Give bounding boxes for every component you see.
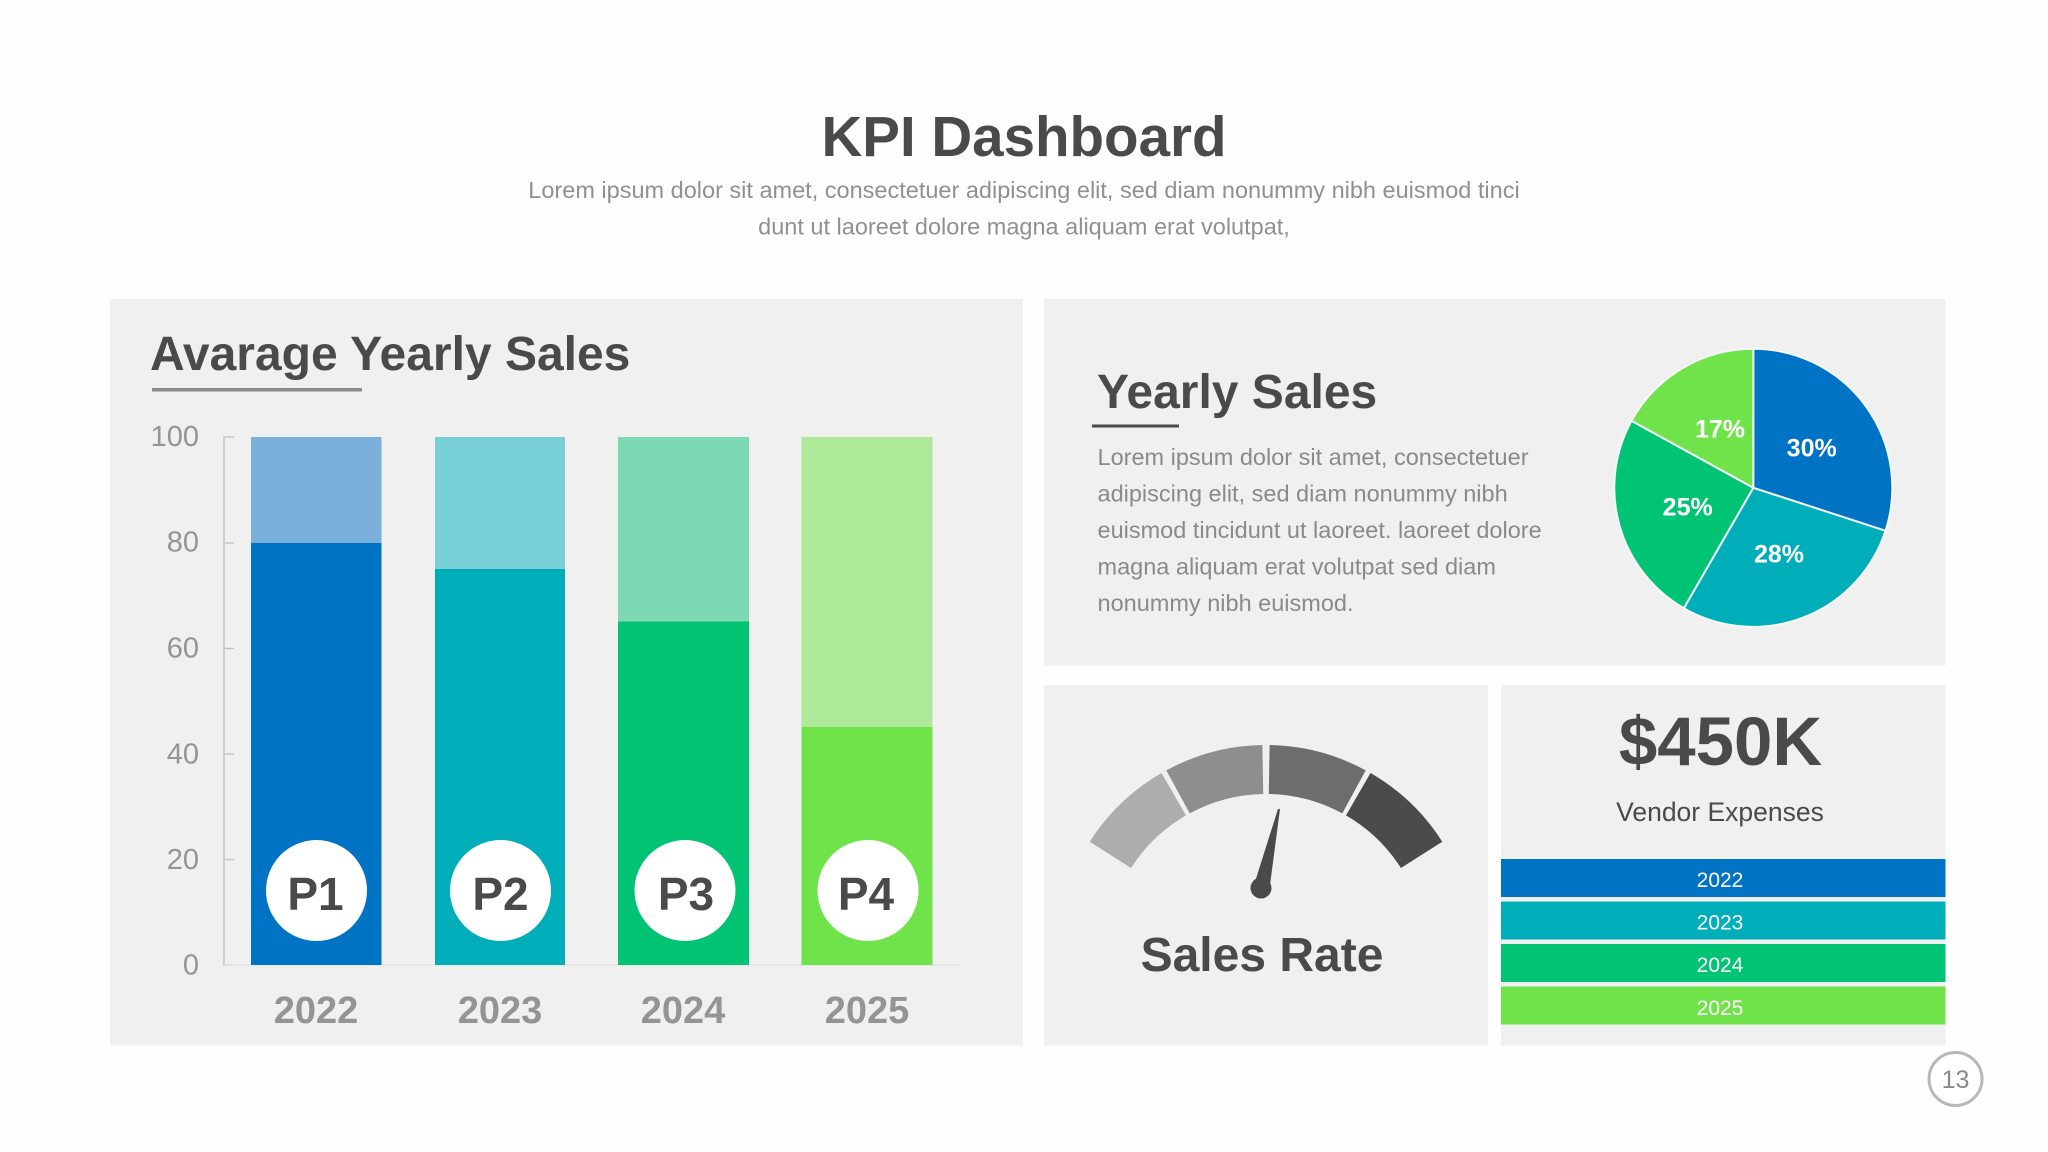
x axis year labels: [274, 990, 909, 1032]
panel: yearly sales: [1044, 299, 1946, 666]
page number: 13: [1942, 1066, 1969, 1094]
x axis year labels: 2022: [274, 990, 358, 1032]
pie labels: 30%: [1787, 435, 1837, 463]
body text: euismod tincidunt ut laoreet. laoreet dolore: [1098, 517, 1542, 543]
x axis year labels: 2023: [458, 990, 542, 1032]
subtitle text: Lorem ipsum dolor sit amet, consectetuer adipiscing elit, sed diam nonummy nibh euismod tinci: [528, 177, 1520, 203]
year bar: 2023: 2023: [1697, 912, 1743, 934]
panel: vendor expenses: [1501, 685, 1946, 1046]
year bar: 2022: [1501, 859, 1946, 897]
badge: P3: [634, 840, 736, 941]
bar: 2022: [251, 437, 382, 965]
body text: magna aliquam erat volutpat sed diam: [1098, 554, 1496, 580]
pie labels: 28%: [1754, 540, 1804, 568]
heading: yearly sales: Yearly Sales: [1097, 366, 1377, 419]
y axis labels: 40: [167, 738, 199, 770]
heading: average yearly sales: Avarage Yearly Sales: [150, 328, 630, 381]
heading underline: [152, 388, 362, 392]
title: KPI Dashboard: [822, 105, 1226, 168]
pie chart: [1614, 349, 1892, 627]
gauge arcs: [1110, 770, 1422, 855]
page number: [1929, 1052, 1982, 1106]
gauge label: Sales Rate: [1141, 929, 1383, 982]
body text: [1098, 444, 1542, 616]
year bar: 2025: [1501, 986, 1946, 1024]
year bar: 2023: [1501, 902, 1946, 940]
bar: 2023: [435, 437, 565, 965]
vendor label: Vendor Expenses: [1616, 797, 1824, 827]
chart axes: [224, 437, 960, 965]
year bar: 2022: 2022: [1697, 869, 1743, 892]
badge: P3: P3: [658, 868, 714, 920]
badge: P2: [450, 840, 551, 941]
x axis year labels: 2025: [825, 990, 909, 1032]
bar: 2024: [618, 437, 749, 965]
subtitle text: [528, 177, 1520, 240]
y axis labels: 60: [167, 632, 199, 664]
pie labels: [1663, 416, 1837, 568]
body text: adipiscing elit, sed diam nonummy nibh: [1098, 480, 1508, 506]
panel: sales rate: [1044, 685, 1488, 1046]
badge: P4: P4: [838, 868, 895, 920]
subtitle text: dunt ut laoreet dolore magna aliquam erat volutpat,: [758, 214, 1290, 240]
panel: average yearly sales: [110, 299, 1023, 1046]
year bar: 2024: [1501, 944, 1946, 982]
gauge needle: [1250, 809, 1280, 898]
y axis labels: 80: [167, 526, 199, 558]
big number: $450K: [1619, 703, 1822, 780]
heading underline: [1092, 424, 1179, 428]
y axis labels: 20: [167, 844, 199, 876]
y axis labels: 100: [151, 421, 199, 453]
pie labels: 17%: [1695, 416, 1745, 444]
badge: P1: P1: [287, 868, 344, 920]
bar: 2025: [802, 437, 932, 965]
year bar: 2024: 2024: [1697, 954, 1744, 977]
badge: P1: [266, 840, 367, 941]
badge: P2: P2: [472, 868, 529, 920]
body text: Lorem ipsum dolor sit amet, consectetuer: [1098, 444, 1529, 470]
x axis year labels: 2024: [641, 990, 725, 1032]
year bar: 2025: 2025: [1697, 997, 1743, 1020]
body text: nonummy nibh euismod.: [1098, 590, 1354, 616]
y axis labels: [151, 421, 199, 982]
pie labels: 25%: [1663, 494, 1713, 522]
badge: P4: [818, 840, 918, 941]
y axis labels: 0: [183, 950, 199, 982]
